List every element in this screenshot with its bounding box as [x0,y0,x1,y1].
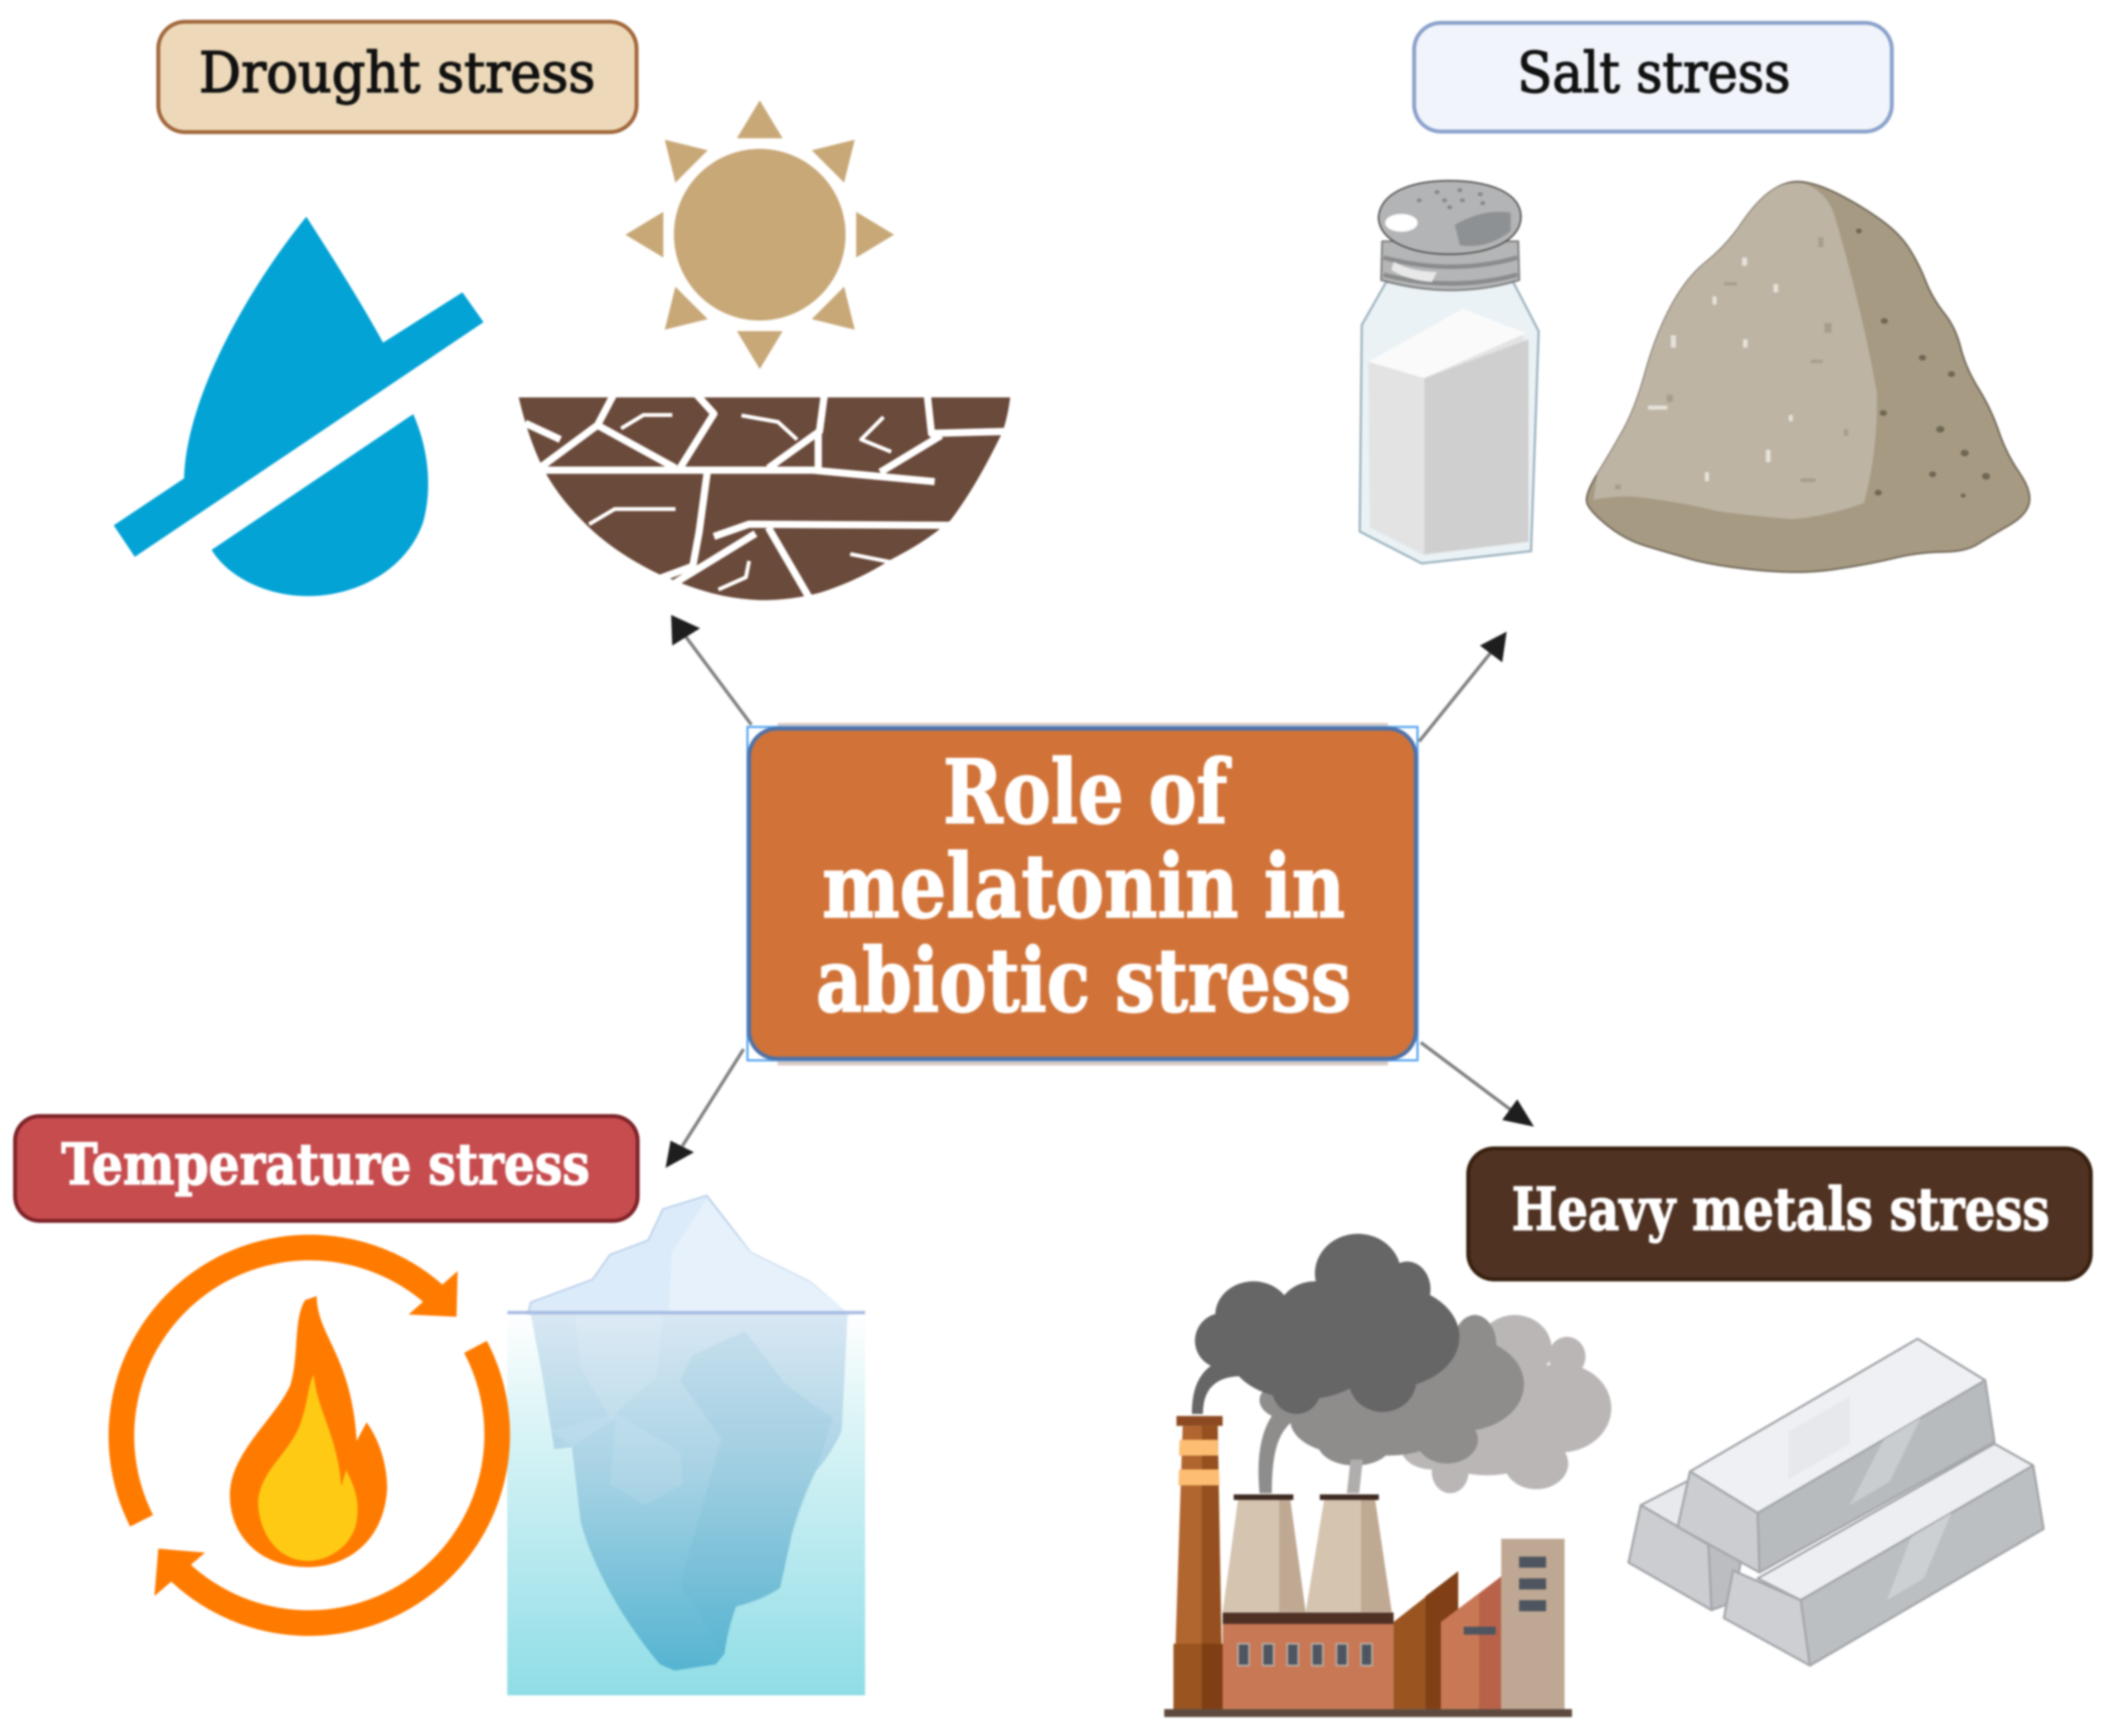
arrow: to drought stress [671,615,751,725]
arrow: to heavy metals stress [1421,1042,1534,1127]
label: Salt stress: Salt stress [1517,40,1790,105]
label: Temperature stress [15,1116,638,1221]
label: Salt stress [1414,23,1892,132]
arrow: to salt stress [1419,632,1507,741]
central box: role of melatonin: melatonin in [822,835,1345,938]
label: Drought stress: Drought stress [199,40,595,105]
label: Temperature stress: Temperature stress [61,1131,590,1198]
icon: factory with smoke [1164,1234,1611,1717]
smoke: dark plume [1192,1234,1459,1414]
icon: sun [625,100,894,369]
icon: iceberg [507,1195,865,1695]
icon: flame in temperature cycle [122,1248,497,1623]
icon: cracked dry soil [519,392,1010,600]
smoke: light plume [1401,1315,1611,1493]
label: Heavy metals stress [1468,1148,2091,1279]
ring arrow: upper [122,1248,458,1521]
panel: heavy metals stress [1164,1148,2091,1717]
smoke: medium plume [1259,1315,1524,1493]
panel: drought stress [114,22,1010,600]
icon: crossed-out water drop [114,217,484,596]
panel: salt stress [1360,23,2030,572]
icon: salt pile [1586,182,2030,572]
flame [230,1296,387,1567]
label: Drought stress [158,22,637,132]
ring arrow: lower [154,1347,497,1623]
panel: temperature stress [15,1116,865,1695]
chimneys and buildings [1164,1416,1572,1717]
icon: salt shaker [1360,181,1538,564]
arrow: to temperature stress [666,1049,744,1168]
icon: metal ingots [1629,1339,2043,1666]
central box: role of melatonin [747,723,1417,1065]
central box: role of melatonin: abiotic stress [816,929,1351,1032]
central box: role of melatonin: Role of [943,741,1231,844]
